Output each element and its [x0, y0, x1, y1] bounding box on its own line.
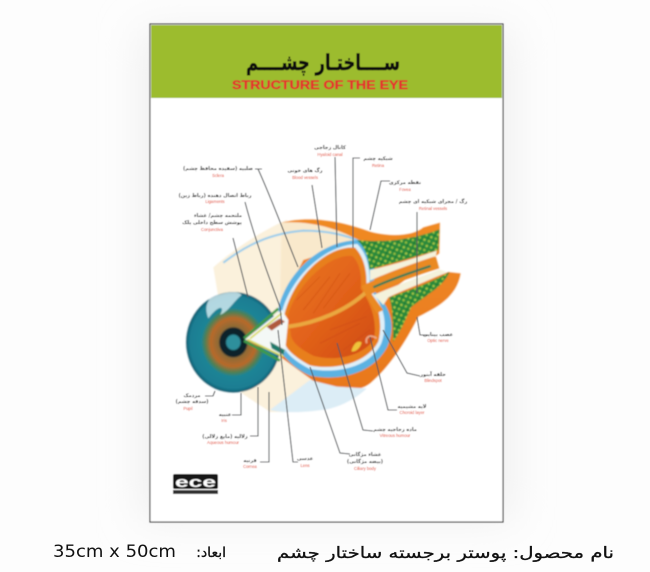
upper yellow stripe: [250, 313, 282, 339]
label: hyaloid canal: کانال زجاجی: [314, 145, 346, 151]
label: pupil: مردمک: [184, 393, 200, 399]
leader: retina: [353, 158, 360, 248]
dimensions caption: ابعاد:: [196, 545, 226, 561]
label: cornea: قرنیه: [243, 458, 257, 464]
label: conjunctiva: [182, 213, 242, 232]
label: aqueous humour: [202, 434, 248, 445]
label: iris: عنبیه: [219, 412, 231, 418]
label: retina: [363, 156, 393, 168]
product name caption: نام محصول: پوستر برجسته ساختار چشم: [277, 544, 614, 563]
label: fovea: Fovea: [399, 187, 411, 192]
leader: blood vessels: [312, 185, 322, 248]
poster: [150, 24, 503, 522]
leader: lens: [278, 330, 298, 462]
lower optic sheath green: [389, 272, 449, 342]
white gap nerve: [370, 251, 437, 281]
label: hyaloid canal: [314, 145, 346, 157]
label: optic nerve: عصب بینایی: [423, 332, 453, 338]
vitreous inner: [287, 256, 375, 358]
pale blue outer arc upper: [223, 231, 360, 263]
label: sclera: صلبیه (سفیده محافظ چشم): [183, 166, 253, 172]
cream mask under sheath: [280, 222, 360, 307]
poster sheet: [150, 24, 503, 522]
leader: retinal vessels: [416, 212, 418, 293]
outer sheath orange: [280, 219, 461, 390]
label: pupil: [175, 393, 209, 411]
label: iris: Iris: [221, 418, 227, 423]
label: fovea: [389, 180, 421, 192]
label: blood vessels: رگ های خونی: [287, 167, 323, 174]
leader: conjunctiva: [233, 238, 248, 297]
publisher logo: ece: [175, 474, 216, 491]
label: ciliary body: [347, 451, 383, 471]
label: cornea: [243, 458, 258, 469]
label: sclera: Sclera: [212, 173, 225, 178]
label: retina: Retina: [372, 163, 385, 168]
label: optic nerve: Optic nerve: [427, 338, 449, 343]
blue band sclera: [278, 240, 392, 377]
leader: hyaloid canal: [335, 157, 337, 247]
leader: fovea: [370, 181, 390, 230]
label: conjunctiva: Conjunctiva: [201, 227, 224, 232]
lower yellow stripe: [247, 339, 283, 357]
title persian: ســــاختـار چشــــم: [246, 51, 400, 76]
label: optic nerve: [423, 332, 453, 343]
label: choroid: [397, 404, 427, 415]
label: lens: عدسی: [297, 456, 313, 462]
pink fold: [366, 336, 377, 343]
upper green cornea stripe: [244, 309, 278, 338]
white gap lower: [374, 269, 447, 305]
ciliary upper: [267, 318, 285, 331]
leader lines: [205, 157, 428, 462]
label: blood vessels: [287, 167, 323, 180]
ciliary lower: [270, 342, 285, 355]
label: cornea: Cornea: [243, 464, 258, 469]
label: pupil: Pupil: [183, 406, 193, 411]
label: fovea: نقطه مرکزی: [389, 180, 421, 186]
label: blindspot: حلقه آبنور: [419, 370, 446, 378]
leader: cornea: [260, 392, 269, 462]
leader: choroid: [370, 337, 397, 410]
leader: optic nerve: [417, 317, 428, 335]
front globe cream: [213, 220, 377, 412]
iris: [186, 292, 281, 393]
retina orange shell: [284, 248, 380, 367]
upper optic sheath green: [357, 229, 439, 269]
publisher logo: [173, 474, 218, 494]
dimensions caption: 35cm x 50cm: [53, 542, 176, 562]
dimensions caption: [53, 542, 226, 562]
leader: aqueous humour: [250, 387, 258, 436]
label: ciliary body: (بیضه مژگانی): [347, 458, 383, 465]
label: ligaments: [178, 193, 252, 204]
label: blood vessels: Blood vessels: [292, 175, 318, 180]
label: ciliary body: غشاء مژگانی: [349, 451, 381, 458]
label: aqueous humour: Aqueous humour: [207, 440, 240, 445]
label: lens: [297, 456, 313, 468]
hyaloid canal band: [288, 292, 367, 327]
green header band: [151, 25, 502, 98]
optic nerve core: [373, 266, 431, 287]
label: ligaments: رباط اتصال دهنده (رباط زین): [178, 193, 252, 199]
lower green cornea stripe: [244, 341, 280, 361]
cornea highlights: [206, 292, 242, 318]
leader: ligaments: [245, 202, 282, 325]
vein streaks: [297, 273, 370, 350]
label: iris: [219, 412, 231, 423]
white inner band: [282, 244, 385, 371]
label: retinal vessels: رگ / مجرای شبکیه ای چشم: [399, 198, 467, 205]
eye illustration: [186, 219, 461, 412]
anterior chamber wedge: [245, 310, 288, 357]
label: vitreous humour: ماده زجاجیه چشم: [373, 427, 417, 433]
label: pupil: (سدقه چشم): [175, 399, 209, 405]
label: vitreous humour: [373, 427, 417, 438]
label: blindspot: [419, 370, 446, 383]
label: blindspot: Blindspot: [424, 378, 442, 383]
label: retinal vessels: Retinal vessels: [419, 206, 447, 211]
label: sclera: [183, 166, 253, 178]
label: retina: شبکیه چشم: [363, 156, 393, 162]
yellow fovea: [352, 342, 362, 352]
pale blue wedge lower: [270, 380, 367, 412]
label: conjunctiva: ملتحمه چشم/ غشاء: [194, 213, 242, 219]
title english: STRUCTURE OF THE EYE: [232, 80, 408, 92]
label: lens: Lens: [300, 463, 310, 468]
label: choroid: لایه مشیمیه: [397, 404, 427, 410]
leader: sclera: [255, 169, 298, 267]
optic nerve: [362, 257, 439, 313]
label: aqueous humour: زلالیه (مایع زلالی): [202, 434, 248, 440]
label: hyaloid canal: Hyaloid canal: [317, 152, 343, 157]
leader: ciliary body: [310, 367, 350, 454]
label: ciliary body: Ciliary body: [354, 466, 377, 471]
leader: blindspot: [383, 330, 420, 376]
label: vitreous humour: Vitreous humour: [380, 433, 411, 438]
label: retinal vessels: [399, 198, 467, 211]
leader: vitreous: [337, 343, 373, 431]
leader: iris: [232, 393, 241, 415]
leader: pupil: [205, 391, 215, 396]
label: choroid: Choroid layer: [400, 410, 425, 415]
label: conjunctiva: پوشش سطح داخلی پلک: [182, 220, 242, 226]
label: ligaments: Ligaments: [205, 199, 225, 204]
